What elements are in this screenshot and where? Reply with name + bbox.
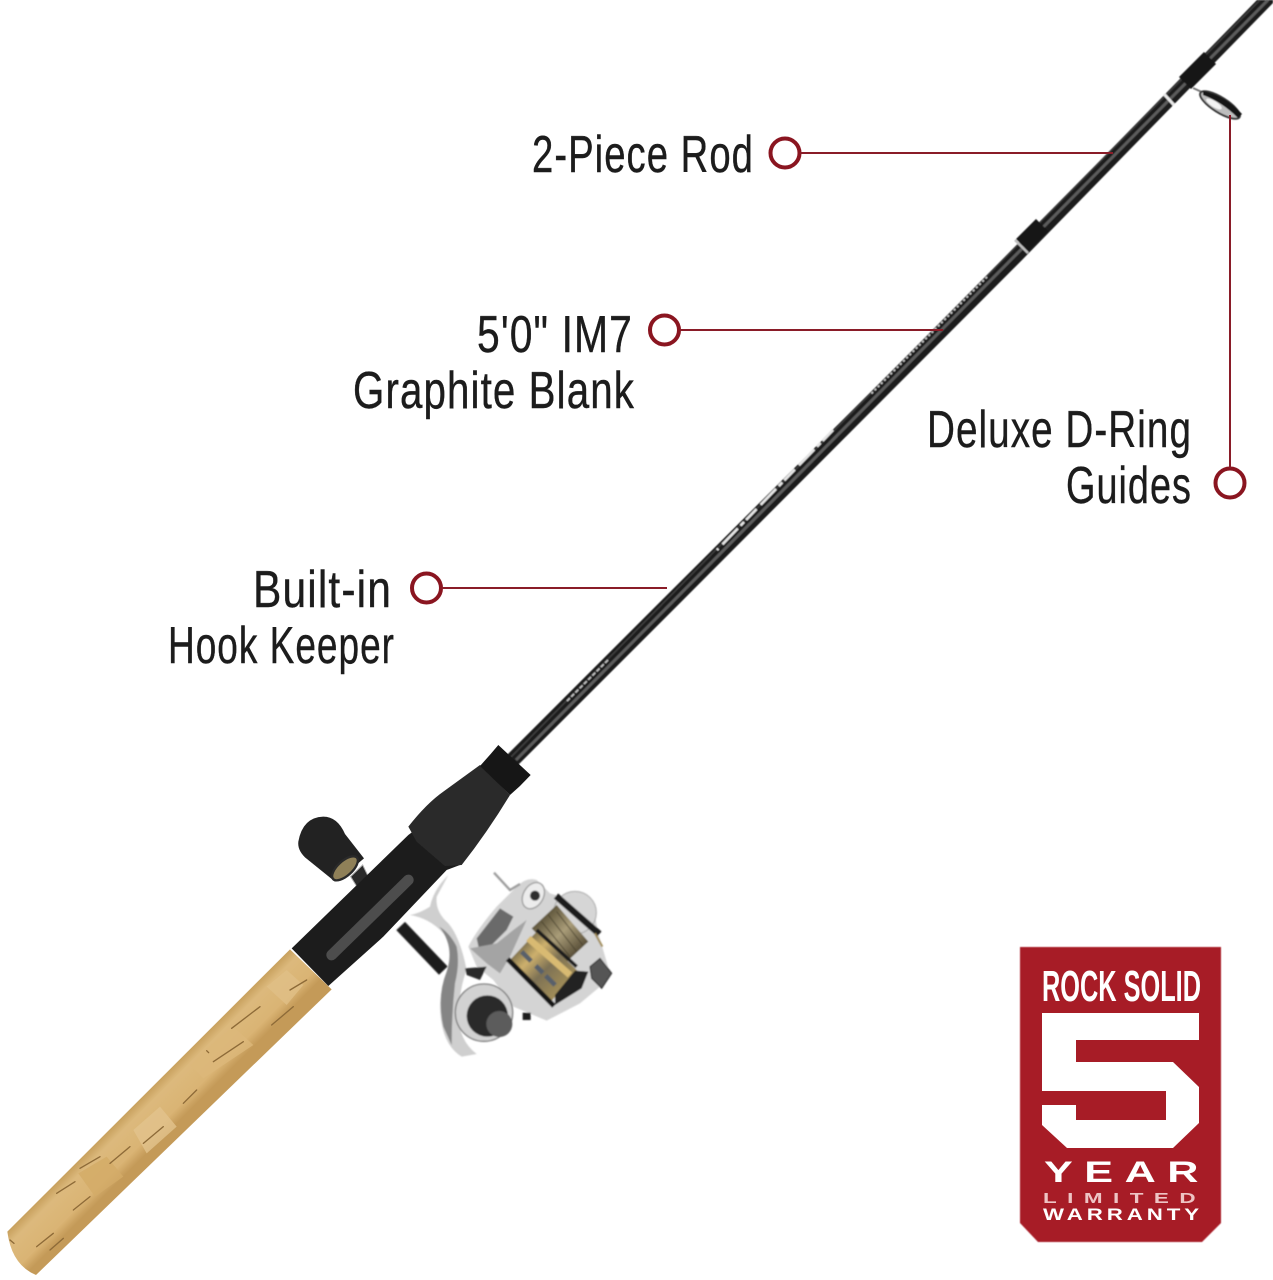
- spool rear shadow: [555, 971, 588, 1005]
- badge word: year: YEAR: [1044, 1156, 1210, 1189]
- mid ferrule: [1022, 225, 1042, 245]
- callout: hook keeper: [168, 561, 667, 675]
- cork handle: [7, 949, 332, 1275]
- spool gold highlight: [528, 938, 570, 975]
- bail wire: [494, 873, 520, 890]
- callout: d-ring guides: [927, 115, 1244, 515]
- line roller: [518, 879, 549, 913]
- spool centre band: [522, 952, 558, 988]
- callout: graphite blank: [353, 306, 943, 420]
- callout: d-ring guides: Guides: [1066, 457, 1192, 515]
- rod ferrule: [1185, 58, 1210, 83]
- callout: d-ring guides: Deluxe D-Ring: [927, 401, 1192, 459]
- rod blank: [500, 0, 1273, 771]
- upper spool lines: [542, 912, 583, 957]
- rod white band: [1164, 94, 1174, 105]
- lower spool: [510, 932, 578, 1002]
- badge numeral 5: [1042, 1013, 1199, 1148]
- reel body: [468, 879, 610, 1021]
- rod model graphic: [717, 430, 833, 550]
- front sleeve: [480, 745, 531, 795]
- callout: graphite blank: 5'0" IM7: [477, 306, 633, 364]
- badge word: warranty: WARRANTY: [1043, 1205, 1203, 1224]
- rod brand mark: [566, 660, 608, 702]
- grip groove: [332, 880, 408, 955]
- body foot tab: [523, 1013, 531, 1020]
- reel stem: [401, 926, 443, 971]
- grip: [292, 745, 531, 986]
- callout: hook keeper: Hook Keeper: [168, 617, 395, 675]
- callout: hook keeper: Built-in: [253, 561, 392, 619]
- spool dome: [554, 891, 596, 934]
- reel: [401, 873, 612, 1057]
- callout: 2-piece rod: [532, 126, 1113, 184]
- handle gold collar: [328, 852, 362, 884]
- body shadow link: [465, 967, 487, 980]
- drag knob: [590, 958, 612, 988]
- handle shaft: [351, 865, 368, 887]
- bearing housing: [455, 984, 513, 1041]
- reel side shadow: [477, 908, 513, 953]
- rod spec dots: [870, 277, 987, 395]
- line guide: [1193, 86, 1243, 124]
- spool dividing flange: [537, 930, 577, 967]
- reel handle knob: [298, 817, 368, 887]
- rear flange: [556, 896, 599, 934]
- badge word: limited: LIMITED: [1043, 1190, 1206, 1207]
- badge: 5 year limited warranty: [1020, 947, 1221, 1242]
- mid ferrule band: [1015, 240, 1028, 253]
- callout: graphite blank: Graphite Blank: [353, 362, 635, 420]
- foregrip: [408, 765, 510, 866]
- flange pin: [595, 933, 602, 947]
- reel side highlight: [470, 920, 527, 973]
- reel foot shading: [439, 927, 458, 1045]
- upper spool: [532, 905, 588, 963]
- callout: 2-piece rod: 2-Piece Rod: [532, 126, 754, 184]
- front flange: [508, 959, 554, 1006]
- reel foot: [410, 875, 477, 1057]
